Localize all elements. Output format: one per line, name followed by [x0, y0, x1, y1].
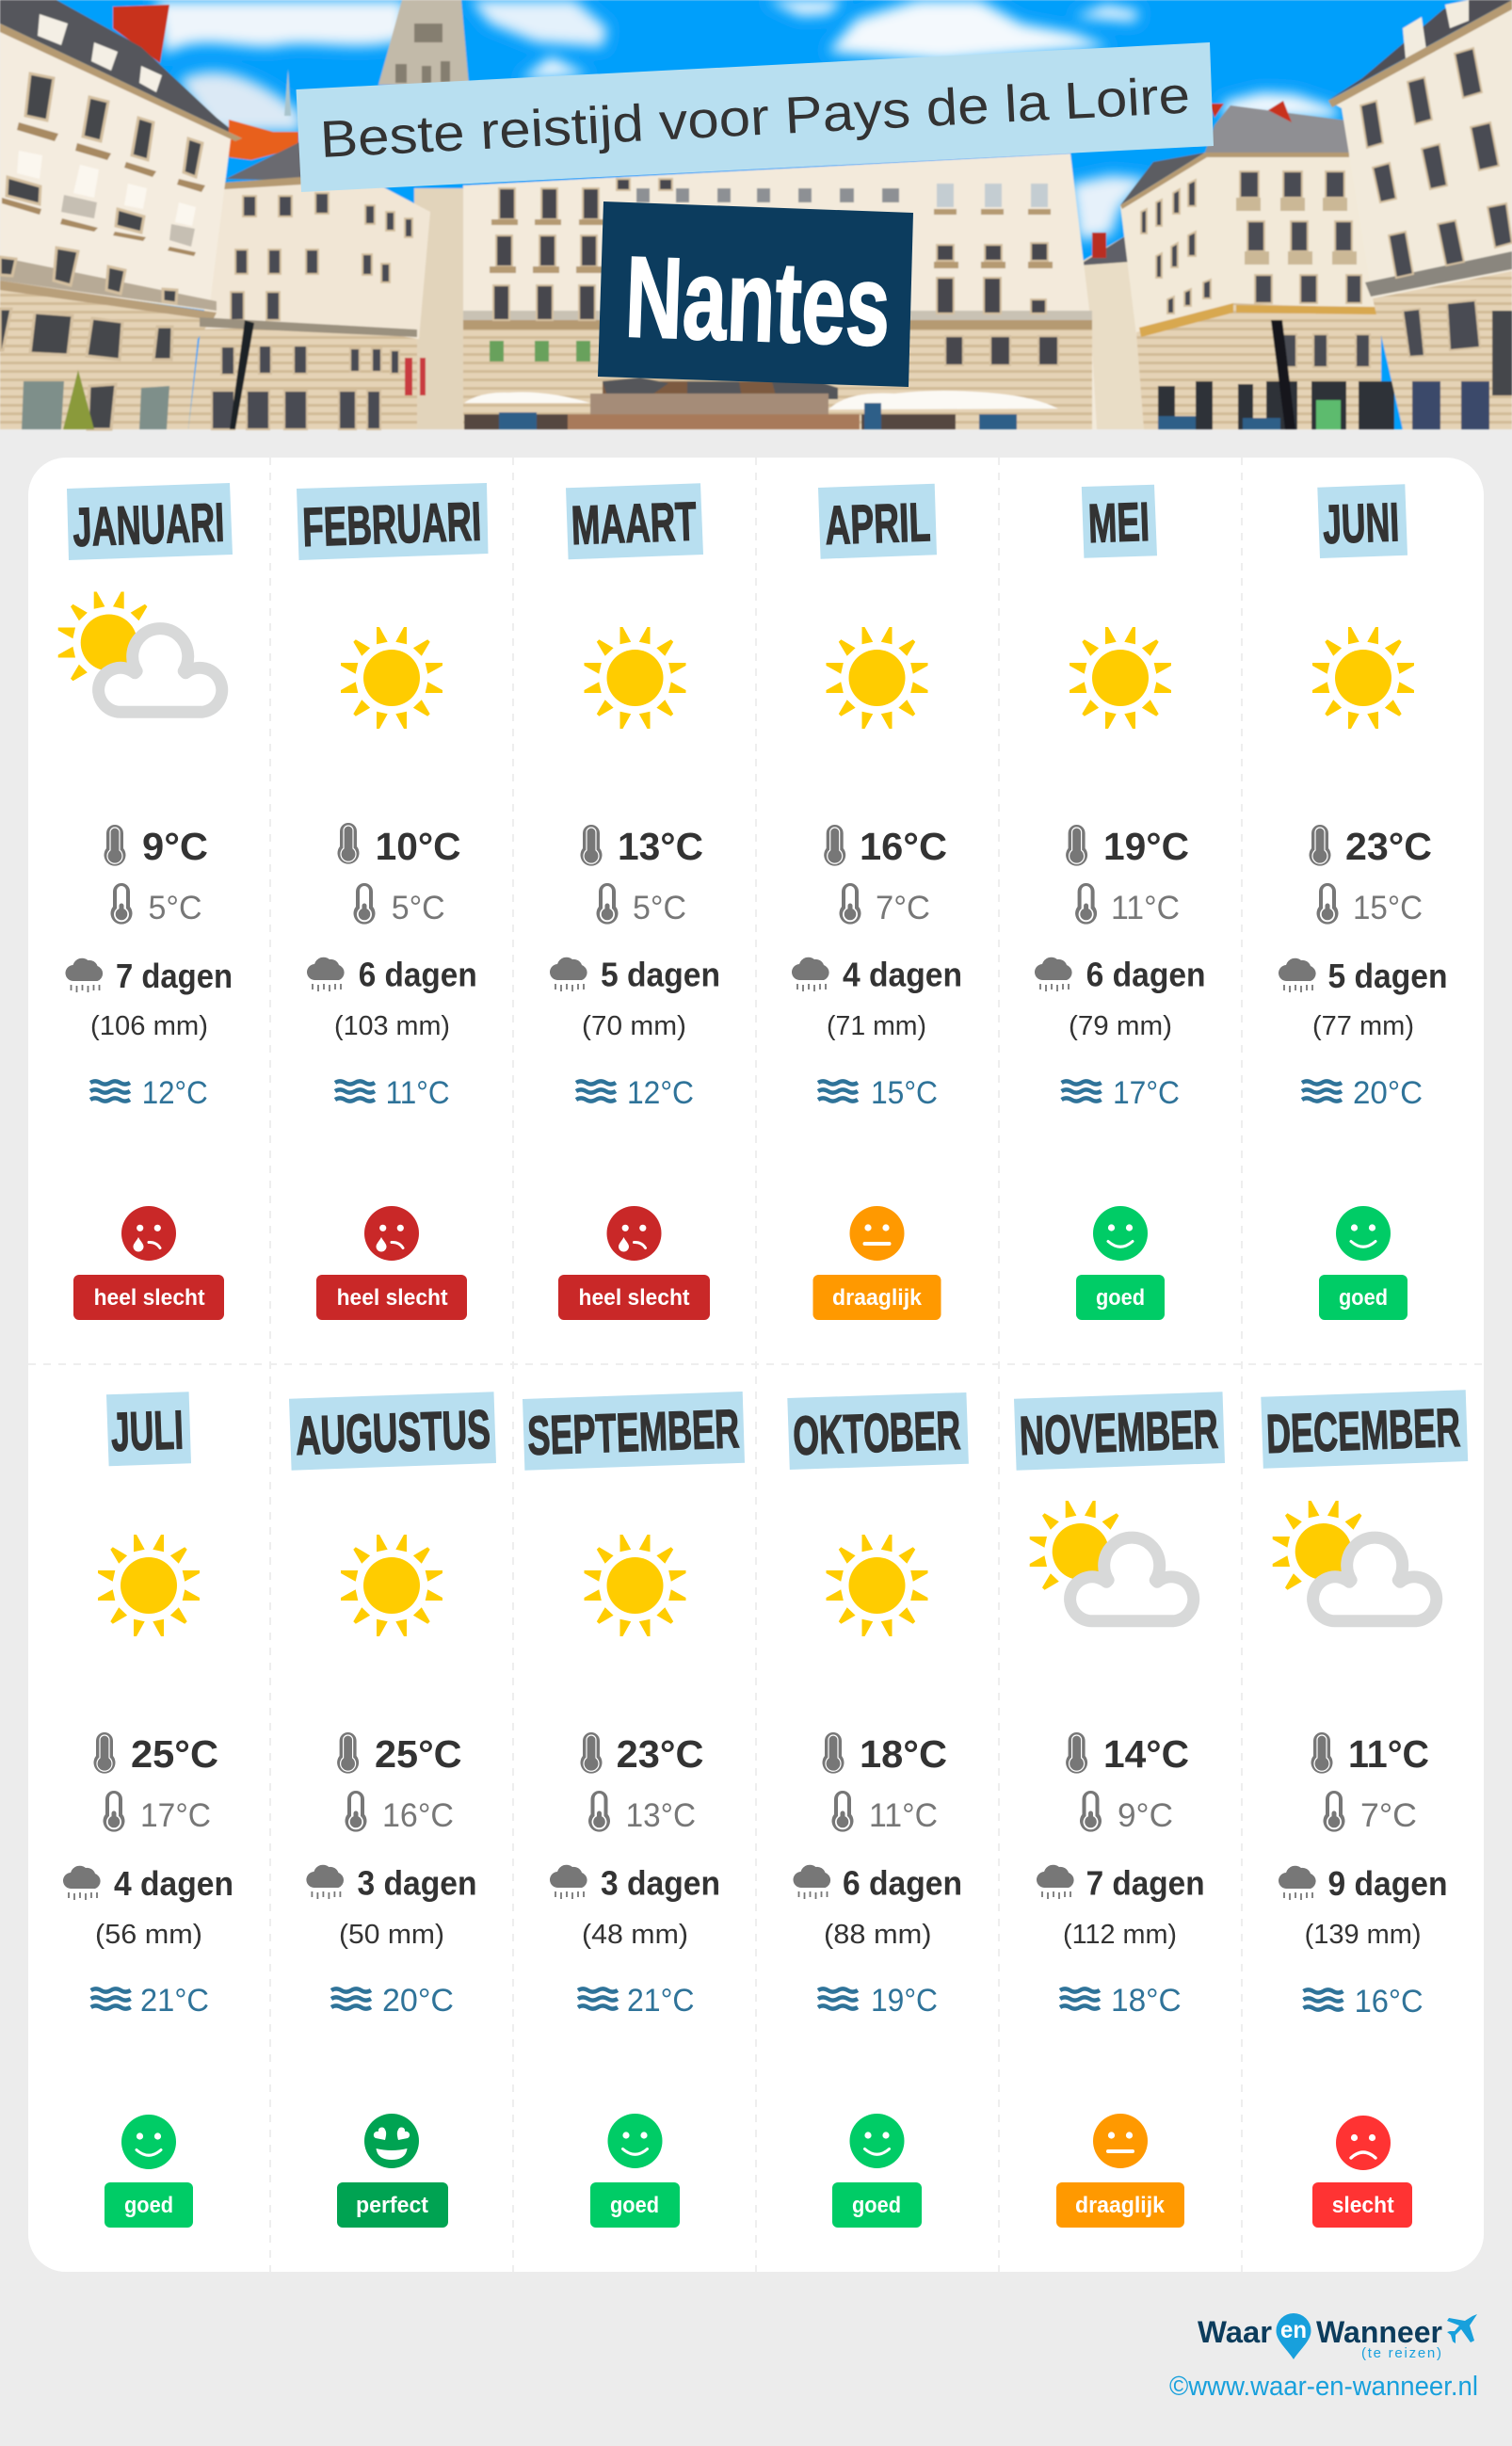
rating: draaglijk: draaglijk — [1075, 2193, 1166, 2218]
panel: januari — [58, 483, 233, 1320]
rain days: 3 dagen — [358, 1864, 476, 1902]
icon: sun behind cloud — [1030, 1501, 1194, 1621]
month heading: MEI — [1087, 491, 1150, 555]
sea temperature: 16°C — [1355, 1984, 1424, 2020]
sea temperature — [576, 1075, 694, 1111]
rating: goed: goed — [852, 2193, 901, 2218]
panel: april — [792, 484, 962, 1320]
min temperature — [840, 883, 930, 926]
max temperature: 23°C — [617, 1732, 704, 1776]
max temperature — [580, 1732, 704, 1776]
min temperature — [588, 1791, 696, 1834]
logo: Waar en Wanneer: Waar — [1198, 2315, 1272, 2349]
sea temperature — [335, 1075, 450, 1111]
max temperature — [1066, 1732, 1189, 1776]
panel: augustus — [289, 1392, 496, 2228]
min temperature: 16°C — [382, 1797, 454, 1834]
rating: slecht — [1312, 2116, 1412, 2228]
icon: sun — [827, 627, 928, 729]
rainfall: (139 mm) — [1305, 1920, 1422, 1950]
max temperature — [104, 825, 208, 868]
logo: Waar en Wanneer: (te reizen) — [1361, 2345, 1441, 2361]
rating: goed — [1076, 1206, 1165, 1320]
rating: goed — [1319, 1206, 1407, 1320]
church — [378, 0, 469, 85]
max temperature: 18°C — [860, 1732, 947, 1776]
max temperature: 11°C — [1348, 1732, 1429, 1776]
month heading: NOVEMBER — [1019, 1399, 1219, 1467]
rating: goed: goed — [1339, 1285, 1388, 1311]
panel: oktober — [787, 1392, 969, 2228]
month heading: FEBRUARI — [301, 491, 482, 558]
rain days — [793, 1864, 962, 1902]
rain days — [1279, 957, 1448, 995]
min temperature: 7°C — [876, 890, 930, 926]
sea temperature: 12°C — [627, 1075, 694, 1111]
min temperature: 17°C — [140, 1797, 211, 1834]
windows left — [0, 73, 202, 429]
sea temperature: 20°C — [1353, 1075, 1423, 1111]
sea temperature: 12°C — [142, 1075, 208, 1111]
rainfall: (79 mm) — [1069, 1011, 1172, 1041]
rain days: 3 dagen — [601, 1864, 720, 1902]
sea temperature: 11°C — [386, 1075, 450, 1111]
month heading: JANUARI — [72, 491, 225, 558]
month heading — [818, 484, 937, 559]
rating: draaglijk — [813, 1206, 941, 1320]
min temperature — [111, 883, 201, 926]
max temperature: 14°C — [1103, 1732, 1189, 1776]
title banner: Beste reistijd voor Pays de la Loire — [318, 65, 1191, 169]
rainfall: (103 mm) — [334, 1011, 450, 1041]
left roof and chimney — [113, 5, 169, 63]
sea temperature — [331, 1983, 454, 2019]
rain days — [792, 955, 962, 994]
panel: juli — [63, 1392, 233, 2228]
rainfall: (77 mm) — [1312, 1011, 1414, 1041]
sea temperature: 21°C — [627, 1983, 695, 2019]
rain days — [306, 1864, 476, 1902]
small building — [1078, 233, 1144, 429]
icon: sun behind cloud — [58, 591, 222, 712]
right building 2 — [1327, 0, 1512, 101]
rating: perfect — [337, 2114, 448, 2228]
rain days — [1035, 955, 1206, 994]
month heading: APRIL — [824, 491, 931, 556]
max temperature — [94, 1732, 218, 1776]
month heading: OKTOBER — [792, 1400, 961, 1467]
min temperature: 5°C — [392, 890, 445, 926]
icon: sun — [341, 627, 442, 729]
rainfall: (56 mm) — [95, 1920, 202, 1950]
sea temperature — [578, 1983, 695, 2019]
panel: juni — [1279, 484, 1448, 1320]
min temperature — [832, 1791, 938, 1834]
month heading — [289, 1392, 496, 1471]
month heading: JULI — [110, 1399, 185, 1463]
icon: sun — [827, 1535, 928, 1636]
website url: ©www.waar-en-wanneer.nl — [1169, 2372, 1478, 2402]
rating: heel slecht: heel slecht — [94, 1285, 205, 1311]
rainfall: (88 mm) — [824, 1920, 932, 1950]
panel: december — [1261, 1390, 1468, 2228]
min temperature — [345, 1791, 454, 1834]
rating: goed — [590, 2114, 680, 2228]
rating: draaglijk: draaglijk — [832, 1285, 923, 1311]
min temperature: 5°C — [633, 890, 686, 926]
header photo: square in Nantes — [0, 0, 1512, 429]
max temperature: 25°C — [375, 1732, 462, 1776]
rain days: 4 dagen — [114, 1864, 233, 1903]
sea temperature: 17°C — [1113, 1075, 1180, 1111]
rating: heel slecht — [316, 1206, 467, 1320]
min temperature — [597, 883, 686, 926]
rating: heel slecht — [558, 1206, 710, 1320]
max temperature: 9°C — [142, 825, 208, 868]
sea temperature — [818, 1983, 938, 2019]
month heading: SEPTEMBER — [526, 1398, 740, 1467]
min temperature: 11°C — [1111, 890, 1180, 926]
month heading — [297, 483, 488, 560]
icon: sun — [584, 1535, 685, 1636]
logo: Waar en Wanneer: en — [1280, 2317, 1307, 2343]
month heading — [1082, 485, 1157, 558]
min temperature — [1316, 883, 1423, 926]
rain days — [1037, 1864, 1205, 1902]
max temperature: 19°C — [1103, 825, 1189, 868]
rain days: 5 dagen — [1327, 957, 1448, 995]
min temperature: 15°C — [1353, 890, 1423, 926]
icon: sun — [341, 1535, 442, 1636]
month heading — [566, 483, 703, 559]
min temperature: 7°C — [1360, 1797, 1417, 1834]
month heading — [1317, 484, 1407, 558]
right building 1 — [1205, 105, 1349, 153]
icon: sun — [1070, 627, 1171, 729]
rain days — [307, 955, 477, 994]
rainfall: (50 mm) — [339, 1920, 444, 1950]
min temperature — [1075, 883, 1180, 926]
city banner: Nantes: Nantes — [623, 233, 893, 370]
max temperature: 10°C — [376, 825, 461, 868]
rainfall: (112 mm) — [1063, 1920, 1177, 1950]
sea temperature — [1302, 1075, 1423, 1111]
month heading — [1014, 1392, 1225, 1471]
sea temperature: 20°C — [382, 1983, 454, 2019]
icon: sun — [584, 627, 685, 729]
max temperature — [1311, 1732, 1429, 1776]
rating: perfect: perfect — [356, 2193, 428, 2218]
panel: maart — [550, 483, 720, 1320]
month heading — [106, 1392, 191, 1466]
rain days: 6 dagen — [843, 1864, 962, 1902]
logo: Waar en Wanneer — [1198, 2313, 1477, 2361]
rain days: 5 dagen — [601, 955, 720, 994]
panel: climate calendar card — [28, 458, 1484, 2272]
first building — [0, 24, 242, 311]
sea temperature — [90, 1075, 208, 1111]
rain days: 7 dagen — [116, 957, 233, 995]
rainfall: (71 mm) — [827, 1011, 926, 1041]
rain days: 6 dagen — [1086, 955, 1206, 994]
sea temperature — [1062, 1075, 1180, 1111]
icon: sun behind cloud — [1273, 1501, 1437, 1621]
month heading: AUGUSTUS — [295, 1399, 491, 1467]
centre building — [463, 153, 1097, 429]
rating: goed — [105, 2115, 193, 2228]
min temperature: 13°C — [626, 1797, 696, 1834]
max temperature — [823, 1732, 947, 1776]
rating: goed — [832, 2114, 922, 2228]
panel: mei — [1035, 485, 1206, 1320]
icon: sun — [1312, 627, 1414, 729]
rain days — [65, 957, 233, 995]
rating: goed: goed — [610, 2193, 659, 2218]
min temperature — [354, 883, 445, 926]
rating: heel slecht — [73, 1206, 224, 1320]
min temperature — [1080, 1791, 1173, 1834]
panel: september — [523, 1392, 745, 2228]
month heading — [787, 1392, 969, 1470]
rating: goed: goed — [1096, 1285, 1145, 1311]
sea temperature: 18°C — [1111, 1983, 1182, 2019]
month heading — [523, 1392, 745, 1471]
rating: goed: goed — [124, 2193, 173, 2218]
rain days — [550, 955, 720, 994]
rainfall: (106 mm) — [90, 1011, 208, 1041]
rainfall: (48 mm) — [582, 1920, 688, 1950]
rating: heel slecht: heel slecht — [337, 1285, 448, 1311]
max temperature — [1066, 825, 1189, 868]
max temperature — [337, 1732, 462, 1776]
title banner — [296, 42, 1214, 192]
min temperature — [104, 1791, 211, 1834]
max temperature: 13°C — [618, 825, 703, 868]
min temperature: 5°C — [149, 890, 201, 926]
logo: Waar en Wanneer: Wanneer — [1316, 2315, 1442, 2349]
rain days — [1279, 1864, 1448, 1903]
max temperature: 25°C — [131, 1732, 218, 1776]
rating: heel slecht: heel slecht — [578, 1285, 689, 1311]
max temperature — [337, 823, 461, 868]
max temperature — [580, 825, 703, 868]
second building — [200, 179, 430, 339]
rain days: 9 dagen — [1327, 1864, 1448, 1903]
panel: februari — [297, 483, 488, 1320]
sea temperature: 19°C — [871, 1983, 938, 2019]
rating: slecht: slecht — [1332, 2193, 1394, 2218]
rainfall: (70 mm) — [582, 1011, 686, 1041]
rating: draaglijk — [1056, 2114, 1184, 2228]
max temperature: 16°C — [860, 825, 947, 868]
city banner: Nantes — [598, 201, 913, 387]
max temperature: 23°C — [1345, 825, 1432, 868]
rain days: 7 dagen — [1086, 1864, 1205, 1902]
sea temperature — [818, 1075, 938, 1111]
rain days — [550, 1864, 720, 1902]
rain days: 4 dagen — [843, 955, 962, 994]
month heading — [67, 483, 233, 560]
icon: sun — [98, 1535, 200, 1636]
sea temperature — [1060, 1983, 1182, 2019]
sea temperature — [91, 1983, 209, 2019]
month heading: MAART — [571, 491, 698, 556]
sea temperature — [1303, 1984, 1424, 2020]
month heading: JUNI — [1322, 491, 1400, 555]
sea temperature: 21°C — [140, 1983, 209, 2019]
sea temperature: 15°C — [871, 1075, 938, 1111]
min temperature: 11°C — [869, 1797, 938, 1834]
min temperature: 9°C — [1118, 1797, 1173, 1834]
rain days — [63, 1864, 233, 1903]
min temperature — [1324, 1791, 1417, 1834]
panel: november — [1014, 1392, 1225, 2228]
fountain and terrace — [464, 391, 1058, 410]
rain days: 6 dagen — [359, 955, 477, 994]
